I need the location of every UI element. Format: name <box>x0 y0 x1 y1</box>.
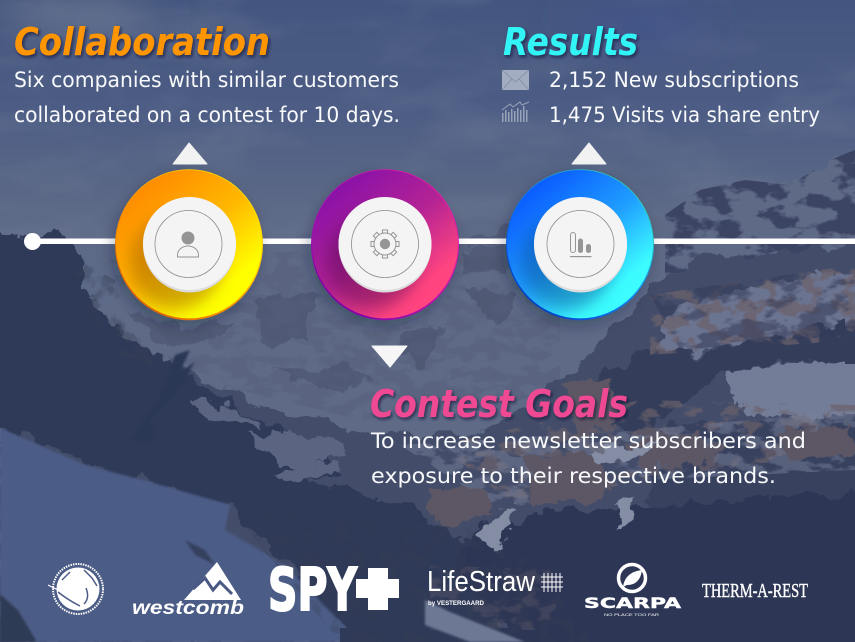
snow patches on the ridge <box>190 395 350 482</box>
text: collaboration description: collaborated on a contest for 10 days. <box>14 103 400 127</box>
text: share entry visits: 1,475 Visits via share entry <box>549 103 820 127</box>
logo: SCARPA: NO PLACE TOO FAR <box>604 612 659 617</box>
icon: envelope <box>502 70 529 90</box>
logo: LifeStraw: by VESTERGAARD <box>428 600 484 607</box>
logo: LifeStraw: LifeStraw <box>427 566 536 598</box>
lower mountain mass <box>0 245 855 642</box>
text: contest goals description: To increase newsletter subscribers and <box>370 429 806 453</box>
brown rock patches <box>425 378 850 525</box>
lone tree <box>130 350 195 440</box>
logo: westcomb <box>132 562 244 619</box>
heading: results: Results <box>503 20 638 64</box>
upper right rock texture <box>665 150 855 290</box>
timeline start dot <box>24 233 41 250</box>
text: collaboration description: Six companies with similar customers <box>14 68 399 92</box>
far snowy mountain <box>0 150 855 642</box>
timeline line <box>33 238 855 244</box>
snow slope <box>0 428 360 642</box>
icon: bar chart <box>570 232 592 257</box>
heading: collaboration: Collaboration <box>14 20 270 64</box>
logo: westcomb: westcomb <box>132 598 244 619</box>
logo: SCARPA: SCARPA <box>584 596 681 612</box>
heading: contest goals: Contest Goals <box>370 382 628 426</box>
icon: growth chart <box>502 102 529 122</box>
icon: person <box>178 232 198 257</box>
text: new subscriptions: 2,152 New subscriptions <box>549 68 799 92</box>
down arrow: contest goals <box>372 346 407 367</box>
rock and snow bands on the right <box>570 270 855 520</box>
up arrow: collaboration <box>173 143 207 164</box>
logo: Therm-a-Rest: THERM-A-REST <box>702 580 808 602</box>
logo: SPY+: SPY <box>268 555 358 624</box>
text: contest goals description: exposure to their respective brands. <box>371 464 776 488</box>
snow gullies <box>475 445 660 552</box>
logo: SCARPA <box>584 564 681 617</box>
up arrow: results <box>572 143 606 164</box>
node: contest goals (purple disc with gear icon) <box>311 169 459 320</box>
text: contest goals description <box>370 429 806 488</box>
dark tree mass on the left <box>0 228 500 642</box>
far rock patches <box>125 225 530 386</box>
stream <box>425 600 525 642</box>
logo: LifeStraw <box>427 566 563 607</box>
icon: gear <box>371 230 399 258</box>
logo: globe emblem <box>48 564 103 614</box>
text: collaboration description <box>14 68 400 127</box>
node: results (blue disc with bar chart icon) <box>506 169 654 320</box>
forest and bottom dark area <box>450 495 855 642</box>
node: collaboration (orange disc with person icon) <box>115 169 263 320</box>
